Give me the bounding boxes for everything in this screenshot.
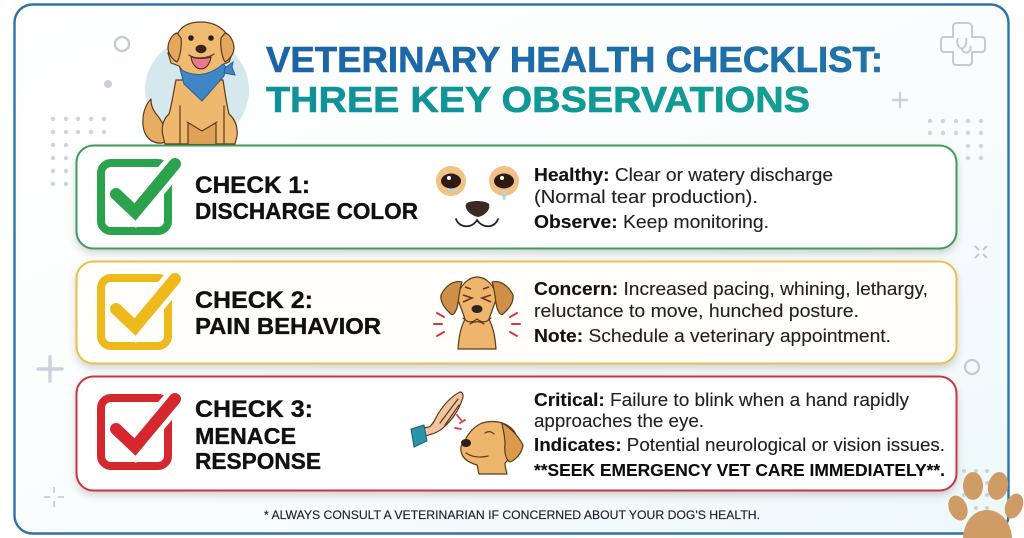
check 3 heading: RESPONSE: [195, 448, 321, 474]
icon: dog eyes and nose with tears: [436, 166, 519, 226]
check 1 heading: [195, 172, 418, 224]
icon: red checkbox: [101, 398, 175, 466]
check 1 details: Observe: Keep monitoring.: [534, 211, 769, 232]
panel: check 1 discharge color: [76, 146, 956, 248]
check 2 details: Note: Schedule a veterinary appointment.: [534, 325, 891, 346]
icon: seated golden retriever with bandana: [143, 22, 249, 144]
check 3 heading: MENACE: [195, 423, 296, 449]
check 3 details: **SEEK EMERGENCY VET CARE IMMEDIATELY**.: [534, 460, 945, 480]
icon: yellow checkbox: [101, 278, 175, 346]
title: [266, 39, 883, 120]
title: THREE KEY OBSERVATIONS: [266, 79, 810, 120]
check 2 heading: CHECK 2:: [195, 287, 313, 314]
footer disclaimer: * ALWAYS CONSULT A VETERINARIAN IF CONCERNED ABOUT YOUR DOG'S HEALTH.: [264, 508, 760, 522]
icon: paw print: [945, 469, 1024, 538]
check 2 details: [534, 278, 928, 346]
check 1 heading: CHECK 1:: [195, 172, 310, 199]
check 3 details: Indicates: Potential neurological or vision issues.: [534, 434, 945, 455]
panel: check 2 pain behavior: [76, 262, 956, 364]
icon: green checkbox: [101, 163, 175, 231]
check 2 details: reluctance to move, hunched posture.: [534, 300, 859, 321]
check 3 details: Critical: Failure to blink when a hand rapidly: [534, 389, 910, 410]
title: VETERINARY HEALTH CHECKLIST:: [266, 39, 883, 80]
check 1 details: Healthy: Clear or watery discharge: [534, 164, 833, 185]
check 2 heading: [195, 287, 381, 339]
check 3 heading: CHECK 3:: [195, 396, 313, 423]
check 3 details: [534, 389, 945, 480]
icon: hand approaching dog's eye: [411, 392, 523, 474]
icon: dog in pain: [434, 277, 520, 349]
check 1 details: [534, 164, 833, 232]
panel: check 3 menace response: [76, 376, 956, 490]
check 2 heading: PAIN BEHAVIOR: [195, 313, 381, 339]
check 1 details: (Normal tear production).: [534, 186, 758, 207]
check 1 heading: DISCHARGE COLOR: [195, 198, 418, 224]
check 3 heading: [195, 396, 321, 474]
icon: medical cross with stethoscope: [941, 23, 985, 65]
check 2 details: Concern: Increased pacing, whining, lethargy,: [534, 278, 928, 299]
check 3 details: approaches the eye.: [534, 410, 704, 431]
